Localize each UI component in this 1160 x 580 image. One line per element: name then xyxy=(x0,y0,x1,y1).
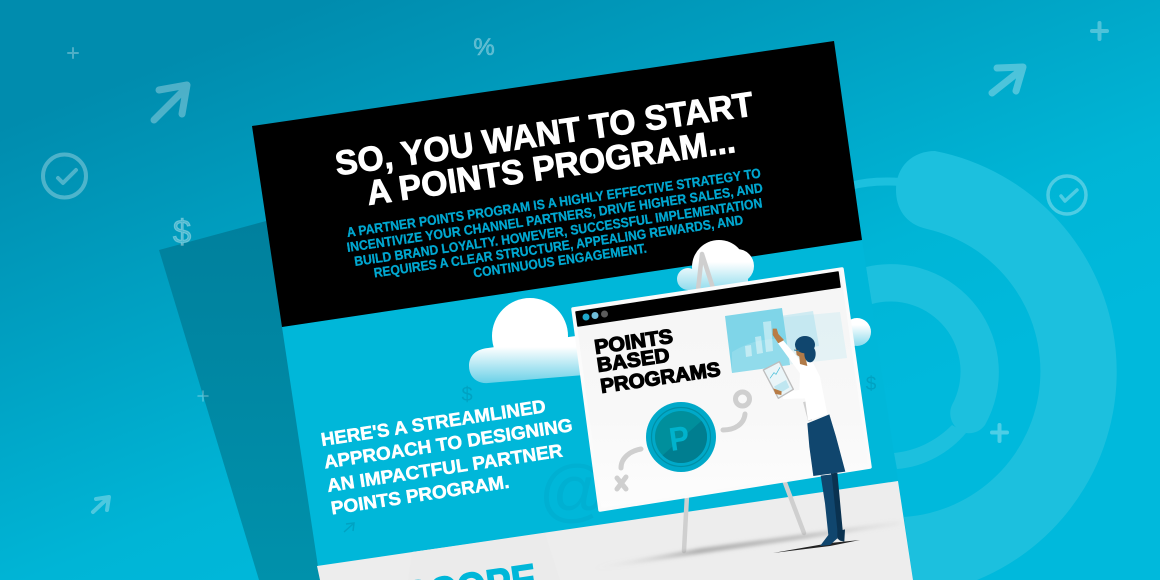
easel pole behind xyxy=(805,402,810,421)
dotted route xyxy=(617,392,750,489)
lead statement: POINTS PROGRAM. xyxy=(329,471,511,518)
lead statement: HERE'S A STREAMLINED xyxy=(319,395,547,450)
cloud left xyxy=(469,298,620,383)
icon: dollar: $ xyxy=(173,213,191,250)
icon: arrow faint xyxy=(344,523,354,532)
background icons xyxy=(43,23,1107,512)
neck and face xyxy=(796,344,807,366)
skirt xyxy=(807,414,845,476)
window dots xyxy=(582,310,608,320)
icon: arrow right xyxy=(992,67,1023,93)
lead statement: AN IMPACTFUL PARTNER xyxy=(325,440,564,496)
easel legs xyxy=(684,254,804,551)
board heading xyxy=(593,326,722,398)
icon: check circle right xyxy=(1048,176,1086,214)
title: SO, YOU WANT TO START xyxy=(333,86,756,183)
intro paragraph: REQUIRES A CLEAR STRUCTURE, APPEALING REWARDS, AND xyxy=(373,212,744,280)
back leg xyxy=(831,473,845,542)
decorative spiral shape xyxy=(850,151,1117,580)
icon: plus top right xyxy=(1092,23,1107,39)
board heading: PROGRAMS xyxy=(599,359,722,398)
icon: plus mid left xyxy=(198,391,208,401)
front leg xyxy=(820,474,837,546)
faint floor band xyxy=(408,533,560,580)
header black panel xyxy=(252,41,862,327)
icon: at sign: @ xyxy=(538,451,610,529)
icon: small arrow left xyxy=(93,497,109,512)
page floor xyxy=(317,481,913,580)
cloud right xyxy=(835,318,871,346)
cloud top xyxy=(677,240,754,294)
lead statement xyxy=(319,395,574,518)
title: A POINTS PROGRAM... xyxy=(364,122,738,213)
glasses xyxy=(794,350,799,351)
intro paragraph xyxy=(346,166,764,280)
woman presenting xyxy=(763,329,845,546)
intro paragraph: A PARTNER POINTS PROGRAM IS A HIGHLY EFFECTIVE STRATEGY TO xyxy=(346,166,762,240)
board heading: BASED xyxy=(596,345,671,377)
lower hand xyxy=(773,388,782,395)
raised hand xyxy=(773,329,784,343)
icon: dollar faint: $ xyxy=(461,384,473,406)
faint page decoration xyxy=(344,374,877,532)
icon: plus top left xyxy=(68,48,78,58)
board title bar xyxy=(576,272,840,326)
floating chart panels xyxy=(725,308,847,373)
intro paragraph: CONTINUOUS ENGAGEMENT. xyxy=(472,241,648,280)
intro paragraph: INCENTIVIZE YOUR CHANNEL PARTNERS, DRIVE HIGHER SALES, AND xyxy=(346,180,764,255)
presentation board xyxy=(573,269,870,510)
tablet xyxy=(763,362,793,398)
board heading: POINTS xyxy=(593,326,674,359)
icon: plus lower right xyxy=(992,425,1007,441)
shirt xyxy=(778,341,827,421)
icon: check circle left xyxy=(43,154,86,198)
points coin: P xyxy=(667,418,692,458)
lead statement: APPROACH TO DESIGNING xyxy=(322,414,574,472)
icon: large arrow left xyxy=(154,85,187,120)
icon: dollar faint right: $ xyxy=(866,374,877,395)
floor shadow xyxy=(590,522,900,569)
intro paragraph: BUILD BRAND LOYALTY. HOWEVER, SUCCESSFUL IMPLEMENTATION xyxy=(353,195,763,269)
person shadow xyxy=(773,540,860,553)
front page cyan body xyxy=(282,240,913,580)
back page xyxy=(159,221,325,580)
points coin xyxy=(646,402,720,475)
icon: percent: % xyxy=(473,34,495,61)
hair xyxy=(795,336,816,362)
